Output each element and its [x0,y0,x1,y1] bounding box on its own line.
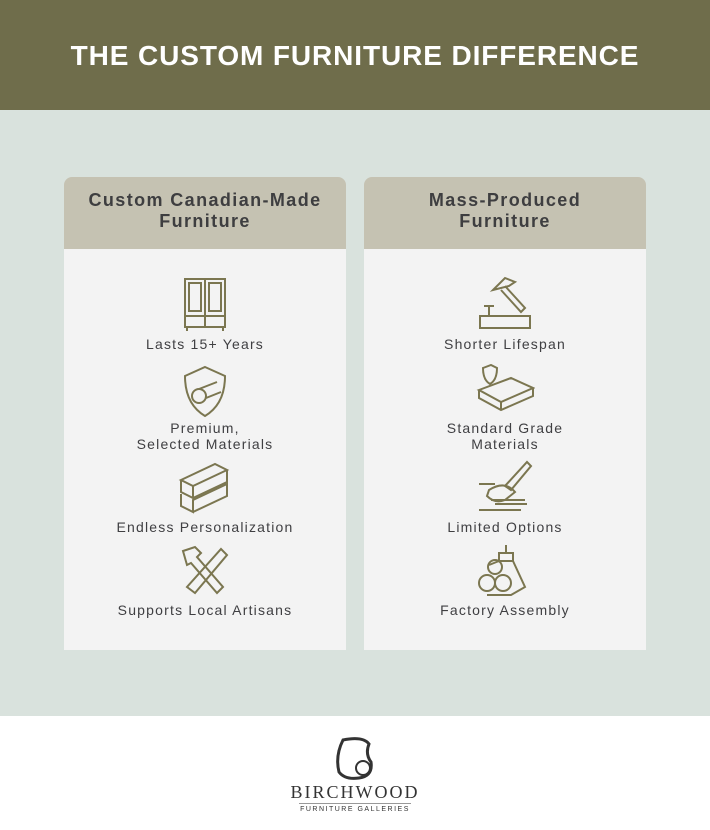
icon: tools [182,546,228,594]
title banner [0,0,710,110]
label: limited: Limited Options [447,519,563,535]
label: standard: Standard Grade [447,420,563,436]
icon: logs [478,545,526,596]
label: standard: Materials [471,436,539,452]
icon: hammer [479,276,531,329]
icon: paint brush [479,460,532,511]
panel header: mass [364,177,646,249]
label: lasts: Lasts 15+ Years [146,336,264,352]
panel header: custom [64,177,346,249]
logo: BIRCHWOOD [290,782,420,802]
label: standard [447,420,563,452]
logo [290,737,420,813]
icon: board [476,364,535,412]
panel header: mass: Furniture [459,211,551,231]
label: shorter: Shorter Lifespan [444,336,566,352]
label: premium [137,420,273,452]
label: factory: Factory Assembly [440,602,570,618]
label: premium: Premium, [170,420,240,436]
panel: mass [364,249,646,650]
icon: wardrobe [184,278,226,331]
footer [0,716,710,830]
logo: FURNITURE GALLERIES [300,806,410,813]
panel header: custom: Custom Canadian-Made [88,190,322,210]
panel header: mass: Mass-Produced [429,190,581,210]
panel: custom [64,249,346,650]
label: premium: Selected Materials [137,436,273,452]
label: personalization: Endless Personalization [116,519,294,535]
label: artisans: Supports Local Artisans [118,602,292,618]
title banner: THE CUSTOM FURNITURE DIFFERENCE [71,40,639,71]
panel header: custom: Furniture [159,211,251,231]
icon: planks [178,462,230,514]
icon: shield log [184,366,226,418]
